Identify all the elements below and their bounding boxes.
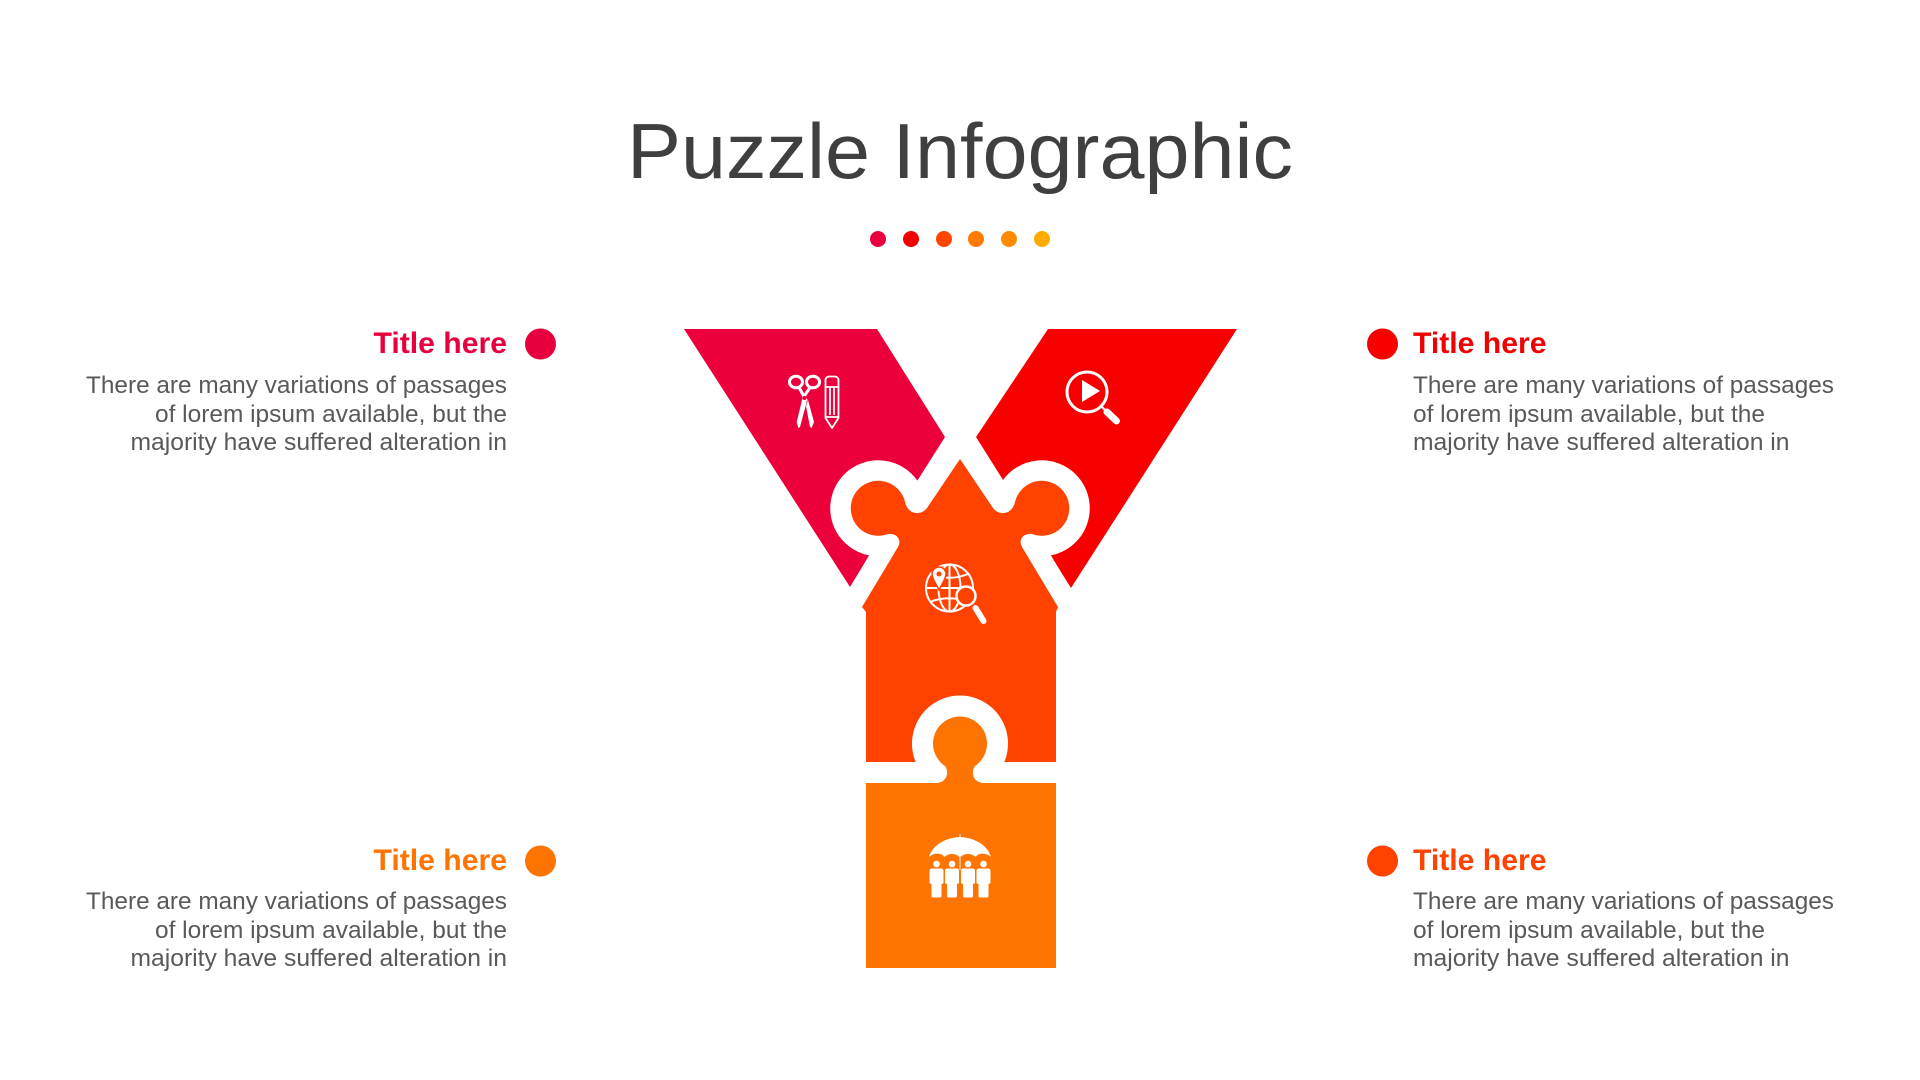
body text: majority have suffered alteration in — [130, 945, 507, 972]
body text — [1413, 888, 1834, 972]
body text: of lorem ipsum available, but the — [155, 401, 507, 428]
icon: globe search — [926, 564, 984, 621]
title: Puzzle Infographic — [627, 107, 1293, 195]
panel: top right text — [1367, 327, 1834, 456]
bullet — [525, 846, 556, 876]
heading: Title here — [1413, 327, 1546, 360]
body text: of lorem ipsum available, but the — [155, 917, 507, 944]
body text: There are many variations of passages — [1413, 372, 1834, 399]
puzzle piece: top right — [976, 329, 1237, 588]
bullet — [525, 328, 556, 360]
icon: video search — [1067, 372, 1116, 421]
panel: bottom right text — [1367, 844, 1834, 972]
body text: There are many variations of passages — [1413, 888, 1834, 915]
bullet — [1367, 328, 1398, 360]
body text: majority have suffered alteration in — [1413, 429, 1790, 456]
panel: top left text — [86, 327, 556, 456]
body text — [86, 372, 507, 456]
bullet — [1367, 846, 1398, 876]
panel: bottom left text — [86, 844, 556, 972]
body text: of lorem ipsum available, but the — [1413, 917, 1765, 944]
body text — [86, 888, 507, 972]
icon: people under umbrella — [929, 834, 991, 898]
body text: There are many variations of passages — [86, 888, 507, 915]
heading: Title here — [374, 844, 507, 877]
body text: of lorem ipsum available, but the — [1413, 401, 1765, 428]
body text: majority have suffered alteration in — [1413, 945, 1790, 972]
body text — [1413, 372, 1834, 456]
decorative colour dots — [870, 231, 1050, 247]
Y puzzle graphic — [684, 329, 1237, 968]
body text: There are many variations of passages — [86, 372, 507, 399]
body text: majority have suffered alteration in — [130, 429, 507, 456]
puzzle piece: centre — [851, 459, 1069, 762]
puzzle piece: top left — [684, 329, 945, 587]
heading: Title here — [1413, 844, 1546, 877]
icon: scissors and pencil — [790, 376, 838, 428]
heading: Title here — [374, 327, 507, 360]
puzzle piece: bottom — [866, 717, 1056, 968]
